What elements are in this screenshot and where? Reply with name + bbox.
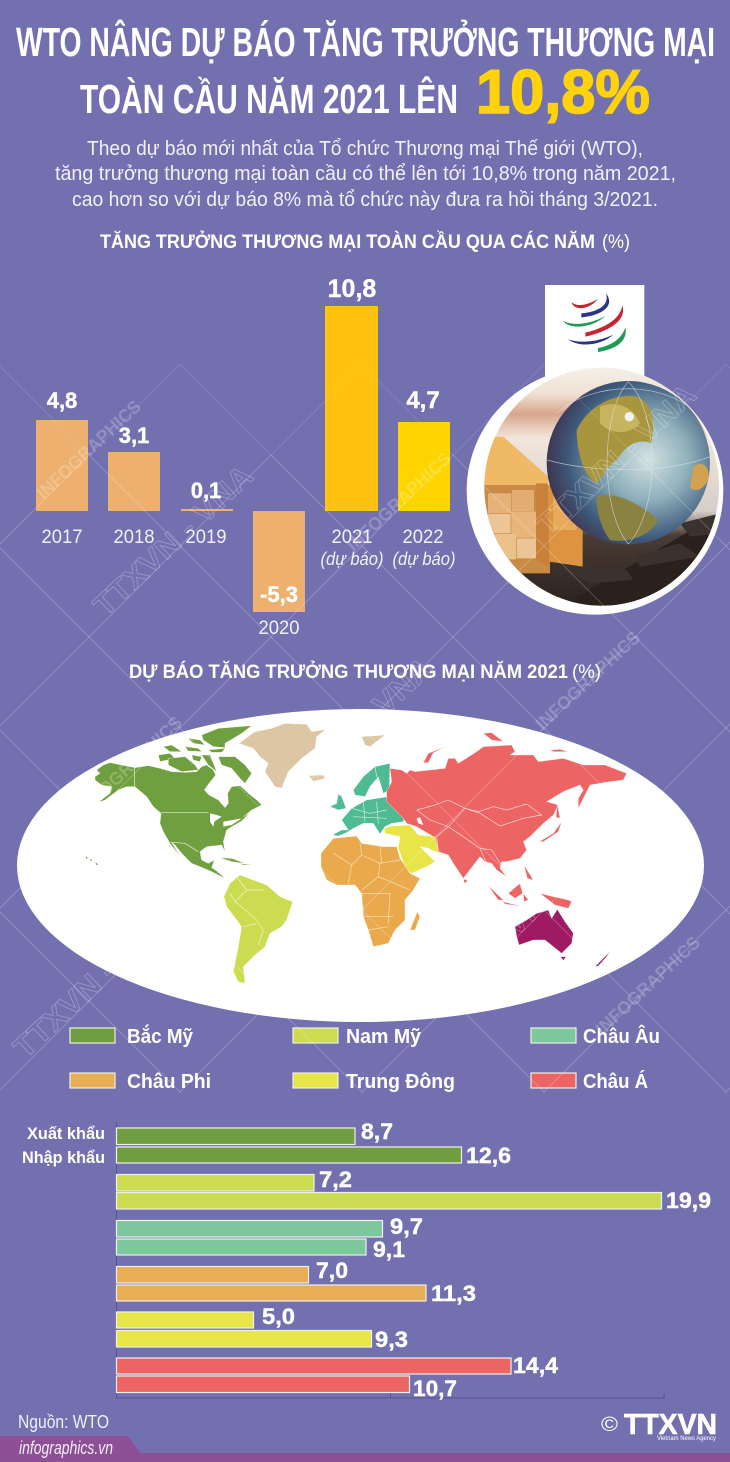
intro text: Theo dự báo mới nhất của Tổ chức Thương mại Thế giới (WTO),: [87, 138, 643, 160]
watermark: INFOGRAPHICS: [33, 396, 145, 503]
values: 7,0: [316, 1258, 348, 1283]
legend: Trung Đông: [346, 1071, 455, 1093]
watermark: INFOGRAPHICS: [343, 448, 455, 555]
photo scene: [480, 365, 723, 608]
column chart: (dự báo): [320, 549, 384, 569]
logo: TTXVN: Vietnam News Agency: [657, 1436, 716, 1442]
map regions: South America: [224, 875, 293, 983]
column chart: 4,8: [47, 388, 77, 413]
values: 14,4: [513, 1353, 559, 1378]
title: TOÀN CẦU NĂM 2021 LÊN: [80, 76, 458, 122]
values: 8,7: [361, 1119, 393, 1144]
column chart: 2019: [186, 527, 226, 548]
Oceania: [515, 909, 610, 967]
bar chart: exports and imports: [22, 1119, 711, 1401]
values: 9,3: [375, 1327, 408, 1352]
watermark: TTXVN - VNA: [267, 651, 440, 815]
world map: [17, 709, 704, 1022]
column chart: -5,3: [260, 582, 298, 607]
column chart: 2018: [114, 527, 154, 548]
row labels: Xuất khẩu: [27, 1124, 105, 1143]
North America: [86, 726, 262, 878]
column chart: [36, 275, 456, 639]
Iceland: [309, 775, 325, 782]
watermark: INFOGRAPHICS: [74, 712, 186, 819]
heading: 2021 forecast map: DỰ BÁO TĂNG TRƯỞNG THƯƠNG MẠI NĂM 2021: [129, 661, 568, 683]
column chart: 3,1: [119, 423, 149, 448]
logo: TTXVN: ©: [601, 1414, 618, 1436]
column chart: (dự báo): [392, 549, 456, 569]
values: 9,7: [390, 1214, 423, 1239]
values: 11,3: [431, 1281, 476, 1306]
column chart: 4,7: [406, 387, 440, 414]
values: 7,2: [319, 1167, 352, 1192]
heading: growth chart: TĂNG TRƯỞNG THƯƠNG MẠI TOÀN CẦU QUA CÁC NĂM: [100, 231, 595, 253]
watermark: [0, 364, 730, 1093]
footer band: [0, 1436, 730, 1462]
watermark: TTXVN - VNA: [530, 378, 703, 542]
values: 10,7: [413, 1376, 457, 1401]
values: 19,9: [666, 1188, 711, 1213]
photo: globe and container with WTO logo: [467, 285, 723, 615]
Europe: [330, 763, 405, 836]
heading: 2021 forecast map: (%): [572, 662, 601, 683]
column chart: 0,1: [191, 478, 221, 503]
legend: Bắc Mỹ: [127, 1024, 194, 1048]
legend: Nam Mỹ: [346, 1026, 422, 1048]
source: Nguồn: WTO: [18, 1412, 109, 1432]
logo: TTXVN: TTXVN: [624, 1409, 717, 1441]
heading: growth chart: (%): [602, 232, 630, 253]
row labels: Nhập khẩu: [22, 1148, 105, 1167]
title: [16, 19, 715, 127]
watermark: TTXVN - VNA: [87, 459, 260, 623]
WTO logo: [563, 293, 626, 352]
values: 12,6: [466, 1143, 511, 1168]
intro text: [55, 138, 676, 211]
website: infographics.vn: [19, 1438, 113, 1458]
values: [262, 1119, 711, 1401]
values: 5,0: [262, 1304, 295, 1329]
Svalbard: [362, 735, 385, 747]
watermark: INFOGRAPHICS: [532, 627, 644, 734]
Asia: [387, 733, 627, 908]
watermark: TTXVN - VNA: [7, 901, 180, 1065]
column chart: 2022: [402, 527, 444, 548]
intro text: tăng trưởng thương mại toàn cầu có thể lên tới 10,8% trong năm 2021,: [55, 163, 676, 185]
Africa: [321, 836, 420, 947]
Great Lakes: [210, 813, 242, 827]
column chart: 10,8: [328, 275, 376, 303]
intro text: cao hơn so với dự báo 8% mà tổ chức này đưa ra hồi tháng 3/2021.: [72, 189, 658, 211]
map regions: North America and Greenland: [86, 723, 326, 878]
title: 10,8%: [476, 58, 650, 127]
Madagascar: [410, 912, 420, 930]
column chart: 2017: [42, 527, 82, 548]
map regions: Old World: [321, 733, 627, 967]
legend: Châu Phi: [127, 1071, 211, 1093]
row labels: [22, 1124, 105, 1167]
values: 9,1: [373, 1237, 405, 1262]
legend: Châu Á: [583, 1070, 648, 1093]
bars: [116, 1128, 662, 1392]
Middle East: [384, 825, 439, 873]
column chart: 2020: [258, 618, 300, 639]
watermark: INFOGRAPHICS: [592, 932, 704, 1039]
legend: Châu Âu: [583, 1024, 660, 1048]
Caspian Sea: [417, 817, 423, 825]
Greenland: [239, 723, 326, 788]
legend: [70, 1024, 660, 1093]
watermark: INFOGRAPHICS: [257, 897, 369, 1004]
watermark: TTXVN - VNA: [452, 821, 625, 985]
column chart: 2021: [332, 527, 372, 548]
